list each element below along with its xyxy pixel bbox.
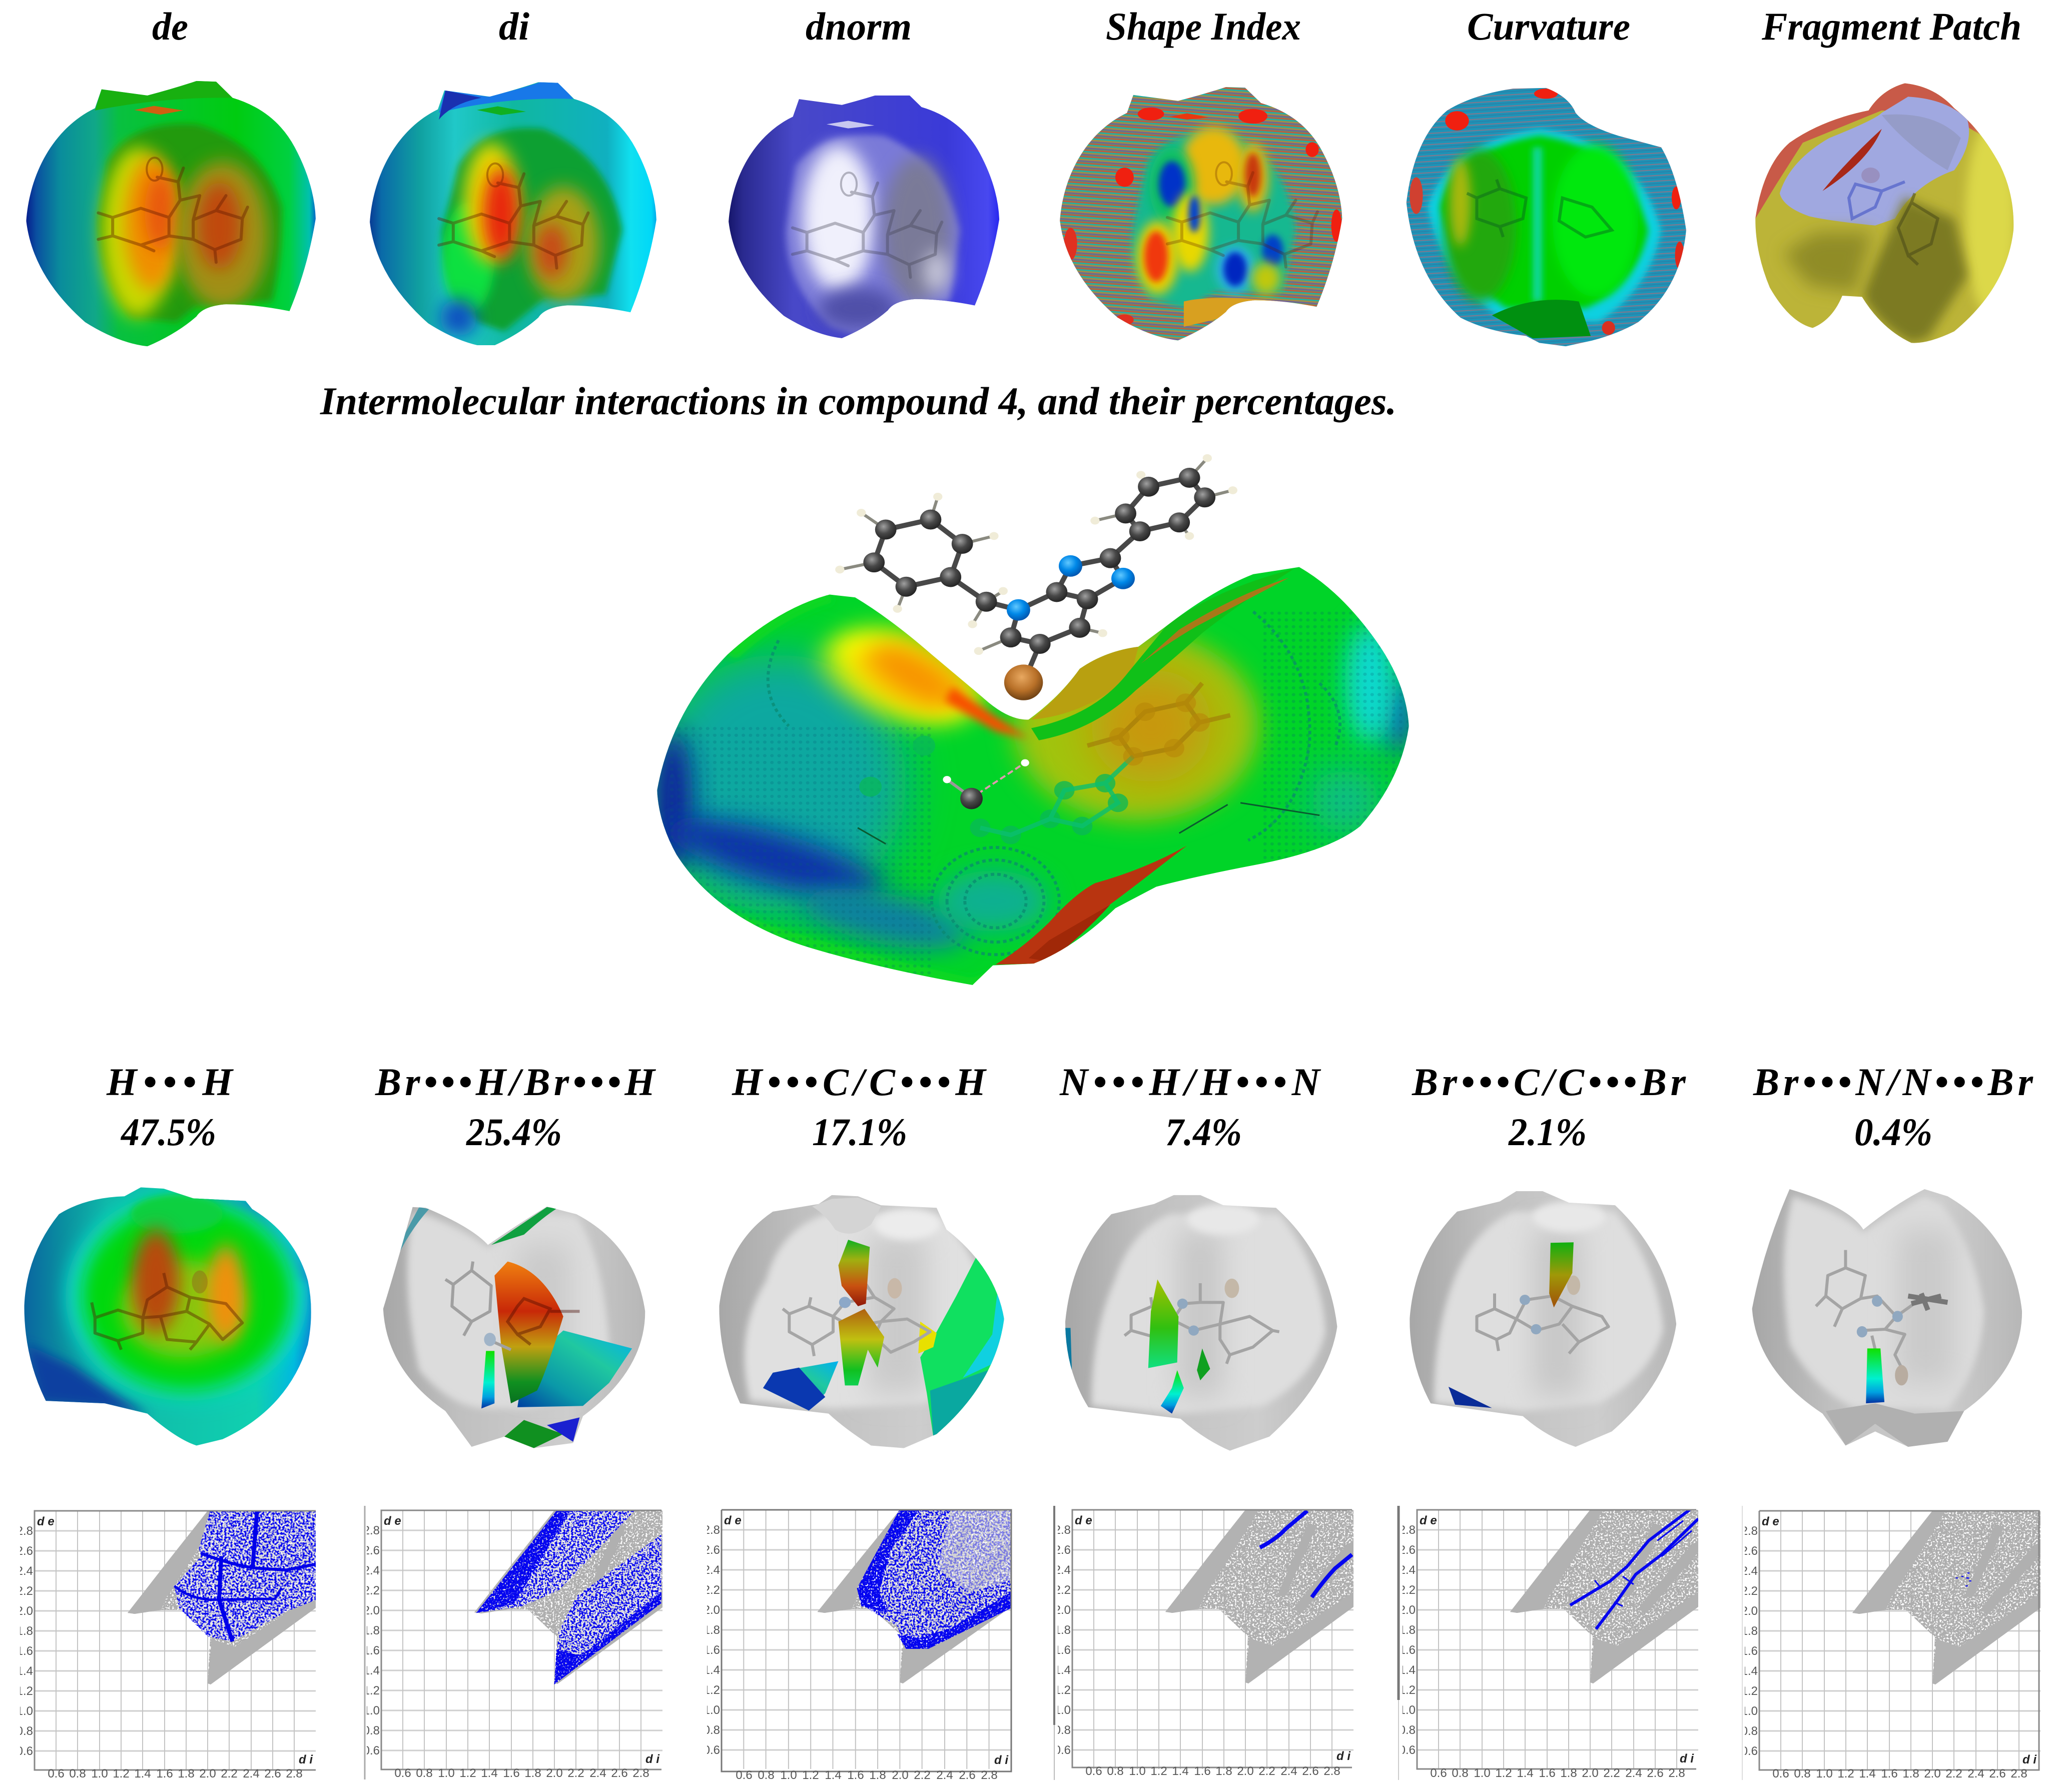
surface: di	[367, 81, 660, 345]
scatter: Br•••N contacts	[1852, 1511, 2040, 1684]
y axis ticks: 0.6	[704, 1743, 720, 1757]
y axis ticks: 1.0	[704, 1703, 720, 1717]
y axis ticks: 2.4	[704, 1563, 720, 1577]
y axis ticks: 2.2	[1741, 1584, 1758, 1598]
label: Br•••N/N•••Br 0.4%: 0.4%	[1854, 1110, 1932, 1154]
surface: de	[25, 80, 318, 348]
x axis ticks: 2.4	[936, 1768, 953, 1782]
x axis ticks: 1.0	[91, 1767, 108, 1780]
scatter: Br•••C contacts	[1510, 1510, 1698, 1683]
y axis ticks: 1.4	[1054, 1663, 1071, 1677]
x axis ticks: 0.6	[1430, 1766, 1447, 1780]
axis names: d e	[37, 1515, 55, 1528]
y axis ticks: 0.8	[363, 1724, 380, 1737]
y axis ticks: 2.6	[363, 1544, 380, 1557]
x axis ticks: 1.4	[481, 1766, 498, 1780]
x axis ticks: 1.4	[1517, 1766, 1534, 1780]
axis names	[1420, 1514, 1694, 1765]
axis names: d i	[1336, 1749, 1351, 1763]
axis names: d i	[994, 1753, 1009, 1767]
y axis ticks	[1399, 1523, 1416, 1757]
x axis ticks: 1.6	[1194, 1764, 1211, 1778]
y axis ticks: 1.6	[1399, 1643, 1416, 1657]
Hirshfeld fingerprint plot: Br•••N	[1741, 1506, 2040, 1780]
label: H•••C/C•••H 17.1%	[732, 1060, 987, 1154]
x axis ticks: 1.8	[1902, 1767, 1919, 1780]
axis names: d e	[384, 1514, 401, 1528]
y axis ticks: 0.6	[1741, 1744, 1758, 1758]
x axis ticks: 2.6	[264, 1767, 281, 1780]
x axis ticks: 2.0	[1924, 1767, 1941, 1780]
x axis ticks: 1.8	[178, 1767, 195, 1780]
y axis ticks	[704, 1523, 720, 1757]
x axis ticks: 2.8	[632, 1766, 649, 1780]
x axis ticks: 2.4	[1625, 1766, 1642, 1780]
surface: N•••H/H•••N	[1062, 1193, 1342, 1452]
y axis ticks	[1054, 1523, 1071, 1757]
y axis ticks: 1.4	[1399, 1663, 1416, 1677]
Hirshfeld fingerprint plot: H•••H	[17, 1510, 316, 1780]
y axis ticks: 2.0	[363, 1604, 380, 1617]
x axis ticks: 0.6	[48, 1767, 65, 1780]
label: N•••H/H•••N 7.4%: N•••H/H•••N	[1059, 1060, 1321, 1104]
axes	[1417, 1510, 1696, 1769]
x axis ticks: 2.8	[2010, 1767, 2027, 1780]
y axis ticks: 1.2	[1054, 1683, 1071, 1697]
y axis ticks: 1.2	[1741, 1684, 1758, 1698]
y axis ticks: 2.0	[704, 1603, 720, 1617]
surface: fragment patch	[1750, 78, 2020, 345]
x axis ticks: 2.6	[1302, 1764, 1319, 1778]
heading: intermolecular interactions: Intermolecular interactions in compound 4, and their percentages.	[320, 379, 1397, 423]
x axis ticks: 2.2	[1258, 1764, 1275, 1778]
y axis ticks: 1.4	[1741, 1664, 1758, 1678]
x axis ticks: 1.6	[503, 1766, 520, 1780]
x axis ticks: 2.4	[1967, 1767, 1984, 1780]
label: N•••H/H•••N 7.4%	[1059, 1060, 1321, 1154]
label: N•••H/H•••N 7.4%: 7.4%	[1165, 1110, 1242, 1154]
x axis ticks: 2.2	[1945, 1767, 1962, 1780]
y axis ticks: 2.8	[704, 1523, 720, 1537]
y axis ticks: 1.0	[1054, 1703, 1071, 1717]
axis names: d i	[645, 1752, 660, 1766]
x axis ticks: 1.2	[1837, 1767, 1854, 1780]
heading: di: di	[499, 5, 529, 48]
x axis ticks: 1.6	[847, 1768, 864, 1782]
y axis ticks: 1.6	[1054, 1643, 1071, 1657]
y axis ticks: 2.4	[363, 1564, 380, 1577]
axis names	[1762, 1515, 2037, 1766]
x axis ticks: 2.0	[546, 1766, 563, 1780]
x axis ticks: 1.2	[802, 1768, 819, 1782]
x axis ticks: 2.4	[1280, 1764, 1297, 1778]
x axis ticks: 1.6	[156, 1767, 173, 1780]
x axis ticks: 1.0	[1816, 1767, 1833, 1780]
x axis ticks: 2.6	[611, 1766, 628, 1780]
x axis ticks: 2.2	[914, 1768, 931, 1782]
x axis ticks: 1.0	[1129, 1764, 1146, 1778]
y axis ticks: 1.0	[363, 1704, 380, 1717]
x axis ticks: 1.4	[1172, 1764, 1189, 1778]
label: Br•••C/C•••Br 2.1%: 2.1%	[1508, 1110, 1587, 1154]
y axis ticks: 2.4	[1741, 1564, 1758, 1578]
x axis ticks: 1.0	[780, 1768, 797, 1782]
axis names: d i	[1680, 1752, 1694, 1765]
y axis ticks	[1741, 1524, 1758, 1758]
label: H•••C/C•••H 17.1%: H•••C/C•••H	[732, 1060, 987, 1104]
label: H•••H 47.5%: 47.5%	[120, 1110, 216, 1154]
axes	[381, 1510, 661, 1769]
label: H•••H 47.5%	[106, 1060, 234, 1154]
y axis ticks: 1.6	[704, 1643, 720, 1657]
x axis ticks: 1.2	[459, 1766, 476, 1780]
y axis ticks: 2.4	[1054, 1563, 1071, 1577]
y axis ticks: 0.6	[1054, 1743, 1071, 1757]
y axis ticks: 2.6	[704, 1543, 720, 1557]
axis names	[1075, 1514, 1351, 1763]
y axis ticks: 2.0	[1741, 1604, 1758, 1618]
x axis ticks	[1085, 1764, 1340, 1778]
axis names: d i	[2022, 1753, 2037, 1766]
y axis ticks: 1.8	[1741, 1624, 1758, 1638]
y axis ticks: 1.6	[363, 1644, 380, 1657]
x axis ticks	[394, 1766, 649, 1780]
y axis ticks: 2.4	[1399, 1563, 1416, 1577]
heading: Curvature: Curvature	[1467, 5, 1630, 48]
y axis ticks: 2.0	[17, 1604, 33, 1618]
y axis ticks: 0.6	[1399, 1743, 1416, 1757]
y axis ticks: 2.6	[1054, 1543, 1071, 1557]
x axis ticks: 2.8	[286, 1767, 303, 1780]
x axis ticks: 2.4	[243, 1767, 260, 1780]
x axis ticks: 2.6	[1647, 1766, 1664, 1780]
scatter: N•••H contacts	[1165, 1510, 1353, 1683]
y axis ticks: 1.4	[704, 1663, 720, 1677]
scatter: H•••C contacts	[818, 1510, 1011, 1683]
surface: H•••H	[20, 1186, 314, 1447]
label: Br•••N/N•••Br 0.4%: Br•••N/N•••Br	[1753, 1060, 2033, 1104]
x axis ticks: 1.2	[1495, 1766, 1512, 1780]
x axis ticks: 1.6	[1539, 1766, 1556, 1780]
y axis ticks: 1.0	[1399, 1703, 1416, 1717]
heading: Shape Index: Shape Index	[1106, 5, 1301, 48]
axes	[35, 1511, 316, 1770]
y axis ticks: 2.2	[1399, 1583, 1416, 1597]
x axis ticks: 0.8	[1794, 1767, 1811, 1780]
central Hirshfeld surface with molecule	[651, 454, 1417, 989]
axis names: d e	[724, 1514, 742, 1527]
surface: shape index	[1055, 85, 1348, 343]
x axis ticks: 1.8	[869, 1768, 886, 1782]
y axis ticks: 1.8	[363, 1624, 380, 1637]
y axis ticks: 2.8	[1054, 1523, 1071, 1537]
x axis ticks: 2.0	[199, 1767, 216, 1780]
y axis ticks: 1.2	[363, 1684, 380, 1697]
surface: curvature	[1401, 86, 1691, 348]
label: Br•••N/N•••Br 0.4%	[1753, 1060, 2033, 1154]
axis names	[724, 1514, 1009, 1767]
Hirshfeld fingerprint plot: Br•••H	[363, 1506, 662, 1780]
label: Br•••C/C•••Br 2.1%: Br•••C/C•••Br	[1412, 1060, 1686, 1104]
y axis ticks	[17, 1524, 33, 1758]
x axis ticks: 0.8	[416, 1766, 433, 1780]
axis names: d e	[1420, 1514, 1437, 1527]
y axis ticks: 0.8	[1741, 1724, 1758, 1738]
surface body	[651, 563, 1417, 989]
x axis ticks: 2.4	[589, 1766, 606, 1780]
x axis ticks: 2.2	[221, 1767, 238, 1780]
x axis ticks: 1.4	[1859, 1767, 1876, 1780]
y axis ticks: 2.0	[1399, 1603, 1416, 1617]
y axis ticks: 2.6	[17, 1544, 33, 1558]
x axis ticks: 2.8	[1323, 1764, 1340, 1778]
x axis ticks: 0.8	[69, 1767, 86, 1780]
y axis ticks: 2.4	[17, 1564, 33, 1578]
x axis ticks: 2.6	[1989, 1767, 2006, 1780]
y axis ticks: 2.8	[1399, 1523, 1416, 1537]
y axis ticks: 1.8	[704, 1623, 720, 1637]
x axis ticks: 0.6	[736, 1768, 753, 1782]
y axis ticks: 1.0	[1741, 1704, 1758, 1718]
y axis ticks: 1.2	[704, 1683, 720, 1697]
axes	[722, 1510, 1011, 1771]
x axis ticks: 1.2	[113, 1767, 130, 1780]
y axis ticks: 1.4	[363, 1664, 380, 1677]
y axis ticks: 2.6	[1399, 1543, 1416, 1557]
axis names: d e	[1762, 1515, 1779, 1528]
axis names	[384, 1514, 660, 1766]
y axis ticks	[363, 1524, 380, 1757]
scatter: Br•••H contacts	[474, 1510, 662, 1684]
y axis ticks: 1.8	[1054, 1623, 1071, 1637]
surface: dnorm	[724, 96, 1002, 345]
surface: Br•••N/N•••Br	[1750, 1187, 2025, 1448]
molecule: ball and stick above surface	[835, 454, 1237, 809]
y axis ticks: 2.6	[1741, 1544, 1758, 1558]
x axis ticks: 1.8	[524, 1766, 541, 1780]
x axis ticks	[1430, 1766, 1685, 1780]
label: H•••H 47.5%: H•••H	[106, 1060, 234, 1104]
y axis ticks: 0.6	[17, 1744, 33, 1758]
axis names: d e	[1075, 1514, 1092, 1527]
x axis ticks: 2.2	[1603, 1766, 1620, 1780]
y axis ticks: 1.4	[17, 1664, 33, 1678]
label: Br•••H/Br•••H 25.4%: Br•••H/Br•••H	[375, 1060, 656, 1104]
y axis ticks: 1.8	[17, 1624, 33, 1638]
label: H•••C/C•••H 17.1%: 17.1%	[812, 1110, 907, 1154]
x axis ticks: 2.0	[1237, 1764, 1254, 1778]
Hirshfeld fingerprint plot: N•••H	[1054, 1506, 1353, 1780]
surface: Br•••H/Br•••H	[380, 1204, 648, 1449]
heading: de: de	[152, 5, 188, 48]
x axis ticks: 0.6	[1772, 1767, 1789, 1780]
y axis ticks: 0.8	[1399, 1723, 1416, 1737]
Hirshfeld fingerprint plot: Br•••C	[1399, 1506, 1698, 1780]
axis names	[37, 1515, 313, 1766]
y axis ticks: 1.6	[17, 1644, 33, 1658]
x axis ticks: 1.0	[438, 1766, 455, 1780]
y axis ticks: 2.8	[1741, 1524, 1758, 1538]
y axis ticks: 0.8	[17, 1724, 33, 1738]
scatter: H•••H contacts	[128, 1510, 316, 1684]
x axis ticks: 0.8	[1452, 1766, 1469, 1780]
label: Br•••H/Br•••H 25.4%: 25.4%	[466, 1110, 562, 1154]
axis names: d i	[299, 1753, 313, 1766]
y axis ticks: 0.8	[1054, 1723, 1071, 1737]
x axis ticks: 1.6	[1881, 1767, 1898, 1780]
label: Br•••C/C•••Br 2.1%	[1412, 1060, 1686, 1154]
y axis ticks: 2.2	[363, 1584, 380, 1597]
x axis ticks: 1.4	[825, 1768, 842, 1782]
x axis ticks: 0.8	[1107, 1764, 1124, 1778]
surface: H•••C/C•••H	[714, 1194, 1009, 1449]
x axis ticks	[1772, 1767, 2027, 1780]
y axis ticks: 1.8	[1399, 1623, 1416, 1637]
x axis ticks: 0.6	[394, 1766, 411, 1780]
x axis ticks: 1.8	[1560, 1766, 1577, 1780]
y axis ticks: 0.8	[704, 1723, 720, 1737]
x axis ticks	[736, 1768, 998, 1782]
heading: Fragment Patch: Fragment Patch	[1761, 5, 2021, 48]
y axis ticks: 1.2	[1399, 1683, 1416, 1697]
Hirshfeld fingerprint plot: H•••C	[704, 1510, 1011, 1782]
axes	[1072, 1510, 1352, 1767]
surface: Br•••C/C•••Br	[1407, 1190, 1680, 1448]
axes	[1759, 1511, 2039, 1770]
y axis ticks: 2.0	[1054, 1603, 1071, 1617]
x axis ticks: 1.4	[134, 1767, 151, 1780]
y axis ticks: 2.2	[1054, 1583, 1071, 1597]
y axis ticks: 1.2	[17, 1684, 33, 1698]
x axis ticks: 2.2	[567, 1766, 584, 1780]
y axis ticks: 2.8	[363, 1524, 380, 1537]
x axis ticks: 1.0	[1474, 1766, 1491, 1780]
y axis ticks: 1.6	[1741, 1644, 1758, 1658]
heading: dnorm: dnorm	[806, 5, 912, 48]
y axis ticks: 2.2	[17, 1584, 33, 1598]
y axis ticks: 0.6	[363, 1744, 380, 1757]
label: Br•••H/Br•••H 25.4%	[375, 1060, 656, 1154]
x axis ticks: 1.8	[1215, 1764, 1232, 1778]
x axis ticks	[48, 1767, 303, 1780]
y axis ticks: 1.0	[17, 1704, 33, 1718]
x axis ticks: 0.6	[1085, 1764, 1102, 1778]
x axis ticks: 2.0	[892, 1768, 909, 1782]
y axis ticks: 2.2	[704, 1583, 720, 1597]
x axis ticks: 2.0	[1582, 1766, 1599, 1780]
x axis ticks: 2.8	[1668, 1766, 1685, 1780]
x axis ticks: 0.8	[758, 1768, 775, 1782]
x axis ticks: 1.2	[1150, 1764, 1167, 1778]
y axis ticks: 2.8	[17, 1524, 33, 1538]
x axis ticks: 2.8	[981, 1768, 998, 1782]
x axis ticks: 2.6	[959, 1768, 976, 1782]
